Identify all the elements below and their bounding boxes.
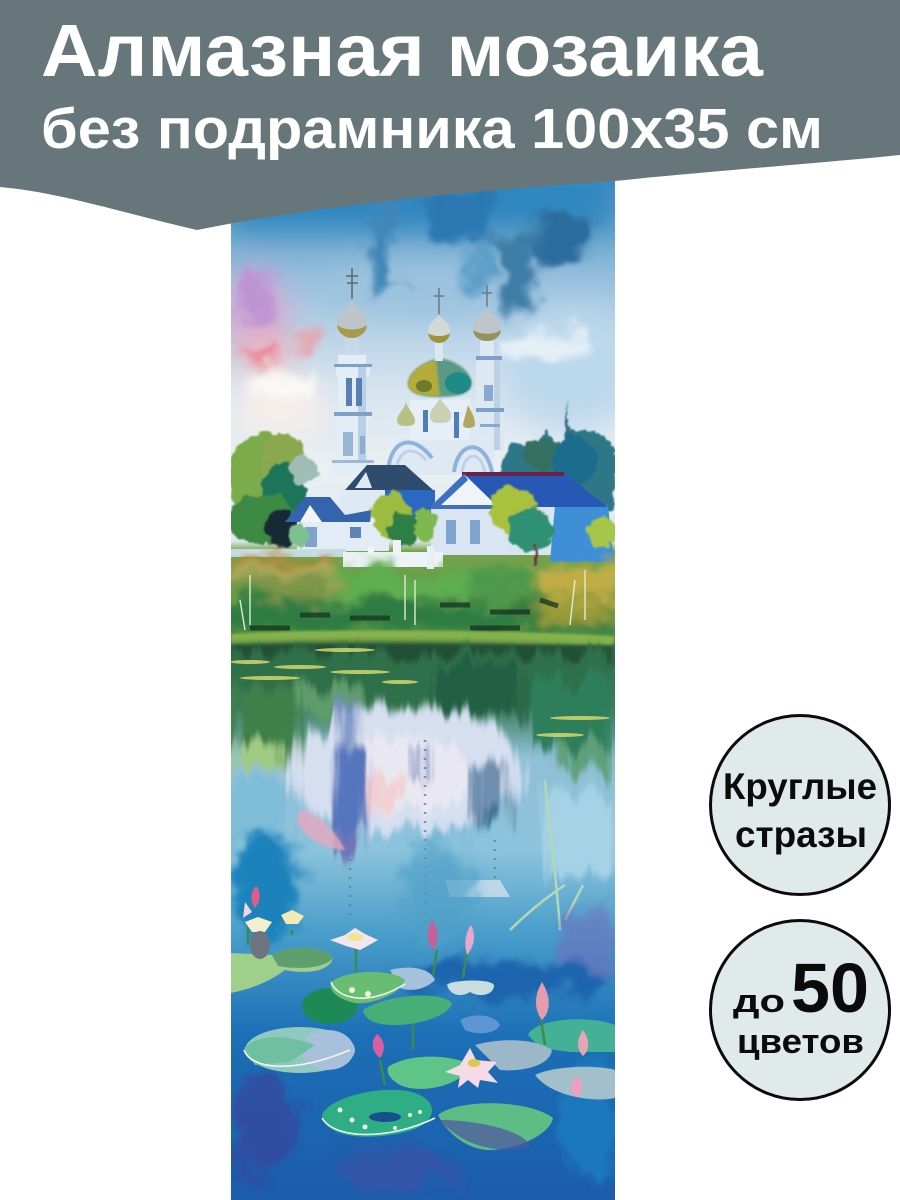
church: central domes and body <box>388 288 495 475</box>
badge: round rhinestones <box>710 716 890 894</box>
sky washes <box>231 182 615 440</box>
badge: round rhinestones: стразы <box>735 814 867 855</box>
subtitle: без подрамника 100х35 см <box>41 97 823 161</box>
building: middle roof house <box>340 465 435 517</box>
building: right large blue-roof house <box>431 472 614 562</box>
distant trees <box>500 400 615 510</box>
building: left small house <box>285 497 389 551</box>
water: tree reflection <box>230 648 615 771</box>
lily pads <box>231 948 615 1150</box>
water: church reflection <box>231 705 615 930</box>
badge: up to 50 colours: до <box>733 983 785 1019</box>
water: lower depth washes <box>230 835 626 1190</box>
church: left bell tower <box>332 268 374 476</box>
meadow <box>231 558 615 664</box>
small garden trees <box>289 486 616 566</box>
badge: up to 50 colours <box>710 920 890 1100</box>
painting: watercolor church and lily pond <box>221 170 640 1200</box>
badge: up to 50 colours: 50 <box>791 949 869 1027</box>
left tree cluster <box>228 433 319 548</box>
header banner <box>0 0 900 230</box>
white fence <box>231 540 443 569</box>
lotus flowers and buds <box>243 886 588 1096</box>
title: Алмазная мозаика <box>41 9 764 92</box>
badge: up to 50 colours: цветов <box>737 1023 864 1061</box>
badge: round rhinestones: Круглые <box>723 766 877 807</box>
church: right bell tower <box>473 285 504 450</box>
